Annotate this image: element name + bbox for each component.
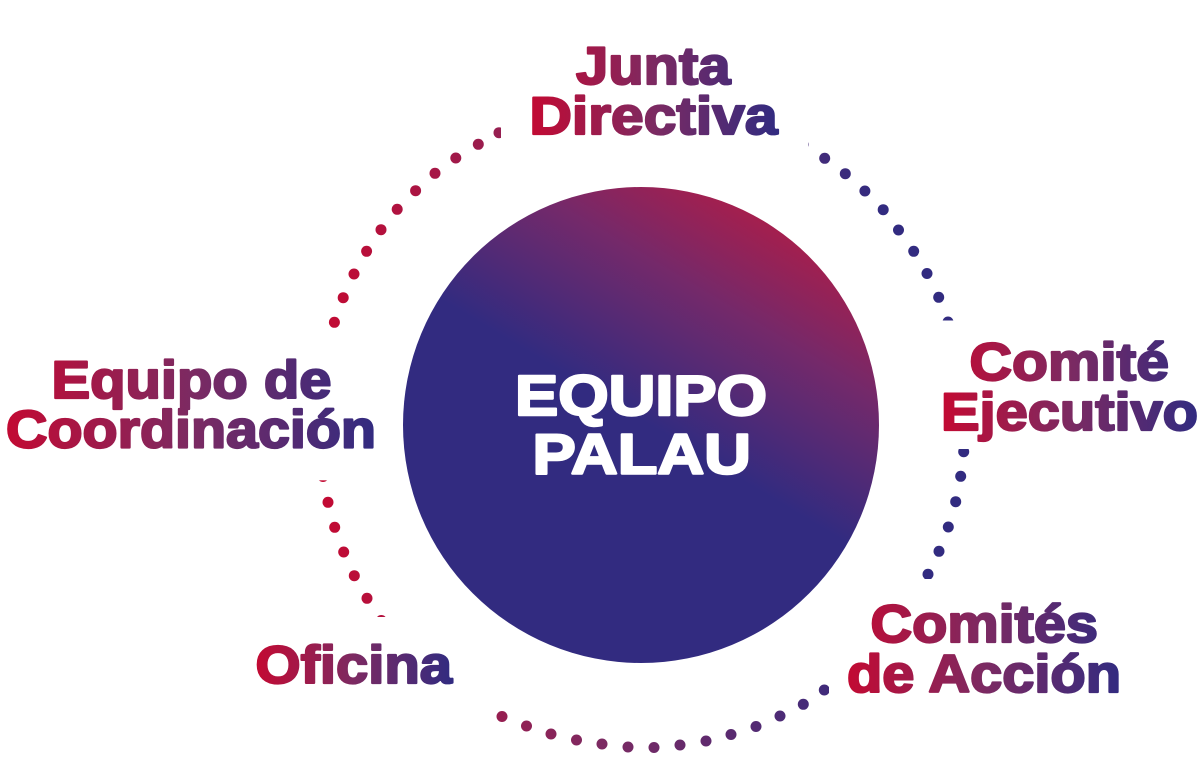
label: Junta Directiva xyxy=(530,37,778,146)
label: Equipo de Coordinación xyxy=(6,351,376,460)
label: Comité Ejecutivo: Comité xyxy=(970,333,1169,392)
label: Comités de Acción: Comités xyxy=(870,595,1098,654)
label: Oficina: Oficina xyxy=(256,636,453,695)
center title: EQUIPO xyxy=(515,364,767,428)
label: Equipo de Coordinación: Coordinación xyxy=(6,400,376,460)
label: Comités de Acción: de Acción xyxy=(847,645,1121,704)
label: Junta Directiva: Junta xyxy=(576,37,731,96)
label: Comités de Acción xyxy=(847,595,1121,704)
label: Junta Directiva: Directiva xyxy=(530,87,778,146)
label: Comité Ejecutivo: Ejecutivo xyxy=(941,383,1198,442)
label: Equipo de Coordinación: Equipo de xyxy=(52,351,332,410)
label: Comité Ejecutivo xyxy=(941,333,1198,442)
center circle xyxy=(403,187,879,663)
center title xyxy=(515,364,767,486)
center title: PALAU xyxy=(532,422,751,486)
dotted ring xyxy=(310,120,980,753)
